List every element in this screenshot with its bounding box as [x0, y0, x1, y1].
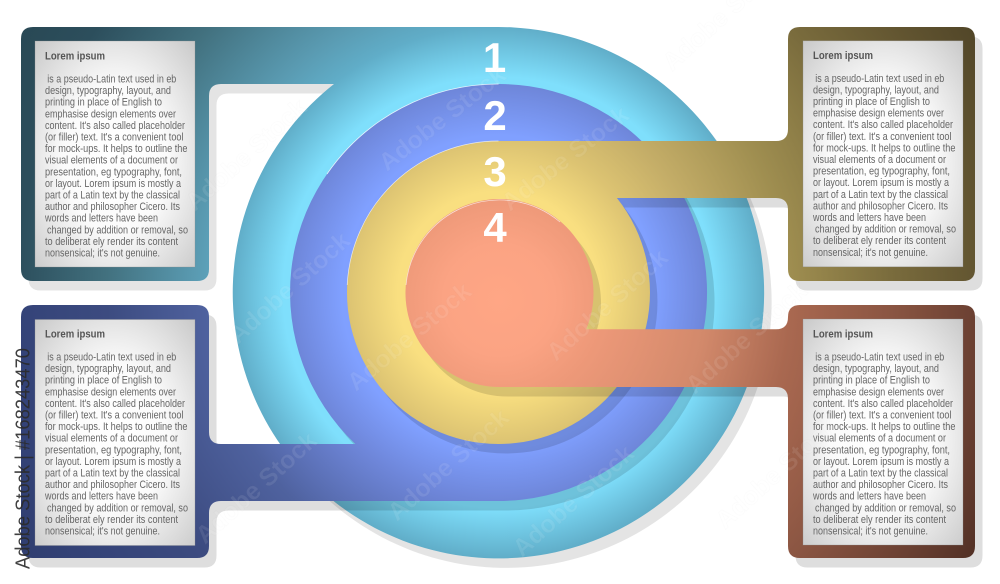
text card: bottom right: visual elements of a document or: [813, 433, 946, 445]
text card: bottom right: [803, 319, 963, 545]
text card: top right: (or filler) text. It's a convenient tool: [813, 131, 952, 143]
text card: top left: printing in place of English to: [45, 97, 162, 109]
text card: top right: [803, 41, 963, 267]
text card: bottom left: words and letters have been: [44, 491, 158, 503]
text card: top right: Lorem ipsum: [813, 50, 873, 62]
text card: top left: is a pseudo-Latin text used in eb: [47, 74, 176, 86]
text card: bottom left: design, typography, layout, and: [45, 363, 171, 375]
faint diagonal stock watermarks: Adobe Stock: [382, 403, 515, 526]
text card: top left: for mock-ups. It helps to outline the: [45, 143, 188, 155]
number 1: 1: [483, 34, 506, 81]
faint diagonal stock watermarks: Adobe Stock: [180, 93, 313, 216]
faint diagonal stock watermarks: Adobe Stock: [680, 276, 813, 399]
faint diagonal stock watermarks: Adobe Stock: [507, 439, 640, 562]
text card: bottom right: part of a Latin text by the classical: [813, 468, 948, 480]
text card: bottom left: visual elements of a document or: [45, 433, 178, 445]
text card: top right: to deliberat ely render its content: [813, 235, 946, 247]
faint diagonal stock watermarks: Adobe Stock: [496, 101, 634, 217]
text card: top right: nonsensical; it's not genuine.: [813, 247, 928, 259]
text card: top right: design, typography, layout, and: [813, 84, 939, 96]
text card: top right: words and letters have been: [812, 212, 926, 224]
text card: bottom left: or layout. Lorem ipsum is mostly a: [45, 456, 181, 468]
text card: bottom left: printing in place of English to: [45, 375, 162, 387]
text card: bottom left: part of a Latin text by the classical: [45, 468, 180, 480]
text card: top left: (or filler) text. It's a convenient tool: [45, 132, 184, 144]
text card: bottom right: to deliberat ely render its content: [813, 514, 946, 526]
text card: top right: part of a Latin text by the classical: [813, 189, 948, 201]
number 4: 4: [483, 204, 507, 251]
text card: top right: content. It's also called placeholder: [813, 119, 953, 131]
text card: bottom right: changed by addition or removal, so: [815, 502, 956, 514]
text card: top left: nonsensical; it's not genuine.: [45, 248, 160, 260]
faint diagonal stock watermarks: [180, 0, 843, 562]
text card: bottom left: (or filler) text. It's a convenient tool: [45, 410, 184, 422]
text card: top right: is a pseudo-Latin text used in eb: [815, 73, 944, 85]
text card: top left: presentation, eg typography, font,: [45, 166, 182, 178]
text card: bottom left: author and philosopher Cicero. Its: [45, 479, 180, 491]
shape 2: navy panel, band and blue disc: [21, 84, 715, 568]
text card: bottom right: Lorem ipsum: [813, 328, 873, 340]
text card: top left: or layout. Lorem ipsum is mostly a: [45, 178, 181, 190]
text card: bottom right: design, typography, layout, and: [813, 363, 939, 375]
text card: top right: presentation, eg typography, font,: [813, 166, 950, 178]
text card: top left: author and philosopher Cicero. Its: [45, 201, 180, 213]
number 3: 3: [483, 148, 507, 195]
number 2: 2: [483, 92, 507, 139]
text card: bottom left: content. It's also called placeholder: [45, 398, 185, 410]
text card: top left: emphasise design elements over: [45, 108, 176, 120]
text card: bottom right: for mock-ups. It helps to outline the: [813, 421, 956, 433]
faint diagonal stock watermarks: Adobe Stock: [541, 243, 674, 366]
text card: top left: words and letters have been: [44, 213, 158, 225]
text card: top left: design, typography, layout, and: [45, 85, 171, 97]
text card: bottom right: nonsensical; it's not genuine.: [813, 526, 928, 538]
text card: top right: author and philosopher Cicero. Its: [813, 200, 948, 212]
text card: bottom right: (or filler) text. It's a convenient tool: [813, 410, 952, 422]
text card: top left: [35, 41, 195, 267]
shape 4: brown panel, band and salmon disc: [405, 199, 982, 567]
text card: bottom left: [35, 320, 195, 546]
text card: bottom left: changed by addition or removal, so: [47, 502, 188, 514]
text card: bottom left: to deliberat ely render its content: [45, 514, 178, 526]
text card: bottom left: for mock-ups. It helps to outline the: [45, 421, 188, 433]
text card: top right: visual elements of a document or: [813, 154, 946, 166]
text card: top left: changed by addition or removal, so: [47, 224, 188, 236]
text card: bottom right: emphasise design elements over: [813, 386, 944, 398]
text card: top left: part of a Latin text by the classical: [45, 190, 180, 202]
text card: bottom right: printing in place of English to: [813, 375, 930, 387]
text card: top right: or layout. Lorem ipsum is mostly a: [813, 177, 949, 189]
faint diagonal stock watermarks: Adobe Stock: [223, 226, 356, 349]
text card: bottom left: is a pseudo-Latin text used in eb: [47, 352, 176, 364]
text card: bottom left: emphasise design elements over: [45, 386, 176, 398]
text card: top right: for mock-ups. It helps to outline the: [813, 142, 956, 154]
faint diagonal stock watermarks: Adobe Stock: [710, 411, 843, 534]
text card: bottom right: or layout. Lorem ipsum is mostly a: [813, 456, 949, 468]
shape 1: teal panel, band and outer disc: [21, 27, 772, 568]
vertical stock credit: Adobe Stock | #168243470: [12, 348, 34, 569]
text card: bottom right: author and philosopher Cicero. Its: [813, 479, 948, 491]
text card: top left: to deliberat ely render its content: [45, 236, 178, 248]
text card: top left: visual elements of a document or: [45, 155, 178, 167]
faint diagonal stock watermarks: Adobe Stock: [373, 61, 511, 177]
text card: bottom right: presentation, eg typography, font,: [813, 444, 950, 456]
text card: bottom left: presentation, eg typography, font,: [45, 444, 182, 456]
faint diagonal stock watermarks: Adobe Stock: [190, 426, 323, 549]
faint diagonal stock watermarks: Adobe Stock: [342, 277, 477, 397]
text card: top left: content. It's also called placeholder: [45, 120, 185, 132]
text card: bottom left: nonsensical; it's not genuine.: [45, 526, 160, 538]
shape 3: olive panel, band and gold disc: [347, 27, 983, 454]
text card: top right: emphasise design elements over: [813, 108, 944, 120]
text card: bottom right: words and letters have been: [812, 491, 926, 503]
text card: bottom right: is a pseudo-Latin text used in eb: [815, 352, 944, 364]
text card: top left: Lorem ipsum: [45, 50, 105, 62]
text card: bottom right: content. It's also called placeholder: [813, 398, 953, 410]
text card: bottom left: Lorem ipsum: [45, 328, 105, 340]
text card: top right: changed by addition or removal, so: [815, 224, 956, 236]
text card: top right: printing in place of English to: [813, 96, 930, 108]
